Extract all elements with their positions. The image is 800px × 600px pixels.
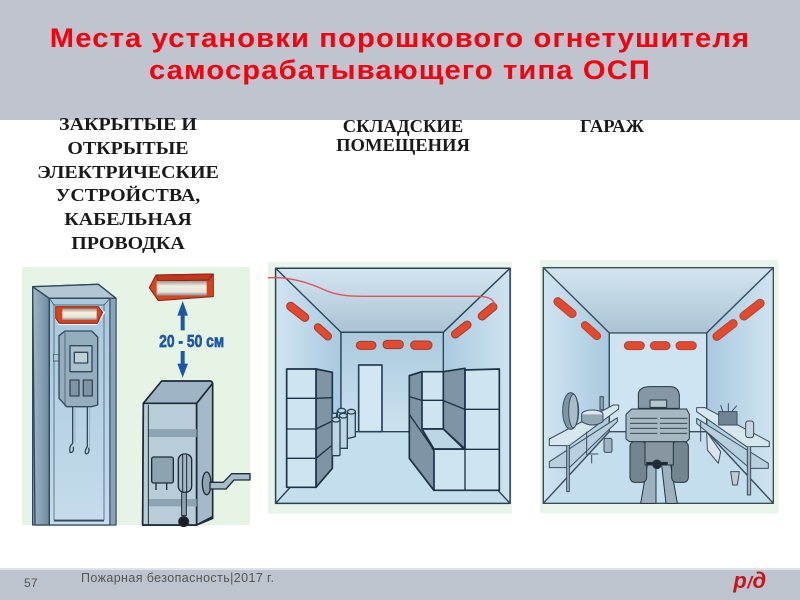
red cable	[268, 278, 495, 305]
right workbench	[697, 403, 769, 495]
extinguisher above device	[149, 274, 213, 301]
illustration: warehouse room	[268, 262, 512, 514]
truck	[626, 387, 689, 503]
title: Места установки порошкового огнетушителя	[50, 23, 750, 53]
label: garage: ГАРАЖ	[580, 116, 644, 136]
label: electrical devices	[37, 114, 219, 253]
switch box	[53, 331, 98, 454]
electric device	[143, 381, 250, 526]
label: warehouses: СКЛАДСКИЕ	[343, 116, 463, 136]
cabinet	[33, 284, 116, 525]
title: самосрабатывающего типа ОСП	[149, 55, 651, 85]
footer rule	[0, 568, 800, 570]
title	[50, 23, 750, 85]
illustration: garage	[540, 260, 778, 513]
label: electrical devices: ЗАКРЫТЫЕ И	[59, 114, 197, 134]
illustration: electrical cabinet	[22, 267, 250, 526]
label: electrical devices: ОТКРЫТЫЕ	[67, 138, 189, 158]
gas cylinders	[332, 408, 355, 456]
extinguishers row	[552, 296, 766, 350]
right shelving	[409, 368, 499, 490]
left shelving	[287, 369, 332, 487]
dimension text: 20 - 50 см	[159, 331, 224, 351]
logo: RZD: р/д	[733, 568, 767, 593]
dimension arrows	[159, 301, 224, 378]
label: electrical devices: КАБЕЛЬНАЯ	[64, 209, 192, 229]
label: electrical devices: ПРОВОДКА	[71, 233, 185, 253]
label: warehouses	[336, 116, 470, 155]
room shell	[276, 268, 510, 503]
footer text: Пожарная безопасность|2017 г.	[81, 571, 274, 585]
label: electrical devices: ЭЛЕКТРИЧЕСКИЕ	[37, 162, 219, 182]
extinguishers row	[285, 301, 498, 349]
header band with title	[0, 0, 800, 120]
extinguisher in cabinet	[56, 307, 104, 324]
label: warehouses: ПОМЕЩЕНИЯ	[336, 135, 470, 155]
label: electrical devices: УСТРОЙСТВА,	[56, 185, 200, 205]
page number: 57	[24, 576, 38, 590]
footer band	[0, 570, 800, 600]
left workbench	[549, 393, 619, 492]
room shell	[543, 268, 773, 503]
door	[359, 365, 382, 432]
